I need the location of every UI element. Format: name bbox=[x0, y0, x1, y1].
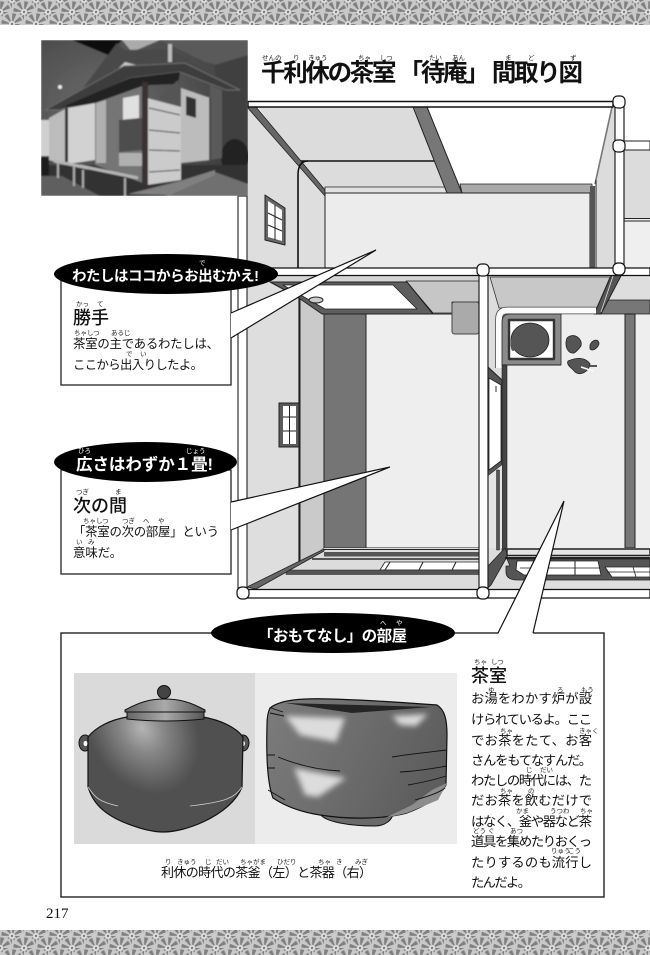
column bbox=[625, 314, 635, 548]
body text: tea room: の bbox=[528, 788, 534, 795]
walls bbox=[49, 109, 65, 165]
body text: tea room: 道具を集めたりおくっ bbox=[471, 834, 592, 849]
heading: つぎ bbox=[76, 487, 90, 496]
image: tea bowl bbox=[255, 673, 457, 844]
pill heading: で bbox=[199, 260, 206, 267]
image caption: みぎ bbox=[355, 857, 368, 866]
image caption: ちゃがま bbox=[240, 857, 266, 866]
top beam bbox=[248, 102, 613, 107]
body text: tea room: ぐ bbox=[488, 828, 494, 835]
title furigana: あん bbox=[452, 54, 466, 62]
heading katte: かっ bbox=[76, 300, 89, 308]
image caption: 利休の時代の茶釜（左）と茶器（右） bbox=[161, 865, 372, 880]
floor plan illustration bbox=[237, 96, 650, 599]
body text: tea room: もう bbox=[581, 686, 594, 694]
body text: 茶室の主であるわたしは、 bbox=[73, 337, 219, 351]
plank wall bbox=[147, 98, 181, 185]
body text: tea room: だい bbox=[540, 766, 553, 774]
body text: ここから出入りしたよ。 bbox=[73, 358, 203, 372]
heading katte: 勝手 bbox=[73, 308, 109, 328]
hearth bbox=[502, 314, 561, 365]
kettle lid bbox=[127, 712, 204, 721]
body text: 意味だ。 bbox=[73, 546, 122, 560]
title furigana: ず bbox=[570, 53, 577, 62]
body text bbox=[73, 329, 219, 372]
pill heading bbox=[54, 442, 237, 482]
body text: み bbox=[88, 538, 95, 546]
body text: ちゃしつ bbox=[83, 517, 109, 525]
title with furigana: 千利休の茶室 「待庵」 間取り図 bbox=[261, 59, 583, 87]
body text: あるじ bbox=[111, 329, 130, 337]
pointer to next room bbox=[231, 467, 390, 530]
pill heading bbox=[54, 254, 278, 294]
pill heading: わたしはココからお出むかえ! bbox=[72, 268, 259, 285]
body text: tea room: お湯をわかす炉が設 bbox=[471, 691, 592, 706]
body text: ちゃしつ bbox=[74, 329, 100, 337]
title furigana: せんの bbox=[262, 54, 282, 62]
heading katte: て bbox=[97, 301, 104, 308]
title furigana: ちゃ bbox=[358, 54, 371, 62]
body text: tea room: はなく、釜や器など茶 bbox=[471, 814, 592, 829]
ceiling oval bbox=[309, 297, 323, 303]
top pattern band bbox=[0, 0, 650, 25]
heading: tea room: 茶室 bbox=[471, 666, 507, 686]
title furigana: り bbox=[293, 54, 300, 62]
image: tea kettle bbox=[74, 673, 255, 844]
bottom beam bbox=[244, 590, 650, 598]
title furigana: きゅう bbox=[308, 54, 328, 62]
utensils bbox=[566, 336, 599, 374]
image caption: じ bbox=[205, 858, 212, 866]
body text: い bbox=[76, 538, 82, 546]
floor bbox=[247, 548, 479, 590]
pill heading: や bbox=[396, 619, 402, 627]
upper room bbox=[238, 96, 650, 268]
body text: tea room bbox=[471, 686, 598, 890]
kettle body bbox=[88, 717, 243, 832]
pill heading: じょう bbox=[186, 447, 206, 455]
body text: や bbox=[158, 517, 164, 525]
heading: 次の間 bbox=[73, 496, 127, 516]
image caption: ひだり bbox=[277, 858, 296, 866]
pointer to tea room bbox=[498, 501, 564, 634]
title furigana: ど bbox=[528, 54, 535, 62]
heading: tea room: ちゃ bbox=[474, 658, 487, 666]
body text: tea room: たんだよ。 bbox=[471, 875, 531, 890]
door bbox=[488, 367, 502, 550]
body text: tea room: だお茶を飲むだけで bbox=[471, 793, 592, 808]
body text: 「茶室の次の部屋」という bbox=[73, 525, 219, 539]
image caption: き bbox=[336, 858, 342, 866]
title furigana: しつ bbox=[380, 54, 393, 62]
title furigana: ま bbox=[505, 54, 512, 62]
body text: tea room: わたしの時代には、た bbox=[471, 773, 592, 788]
middle beam bbox=[238, 268, 650, 276]
wall box bbox=[452, 302, 479, 334]
title furigana: たい bbox=[429, 54, 442, 62]
body text: い bbox=[140, 350, 146, 358]
body text: tea room: でお茶をたて、お客 bbox=[471, 733, 592, 748]
panel: tea room bbox=[61, 501, 604, 897]
post right bbox=[615, 102, 624, 268]
photo of the tea house bbox=[41, 40, 249, 196]
lower eave bbox=[45, 63, 240, 110]
window side bbox=[279, 403, 299, 447]
body text: tea room: ちゃ bbox=[500, 787, 513, 795]
body text: tea room: うつわ bbox=[550, 807, 570, 815]
body text: tea room: ろ bbox=[557, 686, 564, 694]
body text: tea room: けられているよ。ここ bbox=[471, 712, 592, 727]
body text: tea room: かま bbox=[516, 807, 529, 815]
bottom pattern band bbox=[0, 930, 650, 955]
pill heading: ひろ bbox=[78, 447, 91, 455]
upper roof bbox=[84, 42, 168, 88]
icon: upper window bbox=[265, 195, 285, 245]
body text: tea room: ちゃ bbox=[580, 807, 593, 815]
heading: ま bbox=[115, 488, 122, 496]
body text: tea room: りゅう bbox=[551, 847, 570, 855]
body text: tea room: あつ bbox=[510, 827, 523, 835]
body text: tea room: ちゃ bbox=[500, 727, 513, 735]
pill heading bbox=[211, 613, 455, 653]
lower left room: next room bbox=[238, 268, 479, 590]
body text: tea room: さんをもてなすんだ。 bbox=[471, 753, 592, 768]
body text: つぎ bbox=[122, 516, 136, 525]
body text: で bbox=[126, 351, 133, 358]
body text: tea room: たりするのも流行し bbox=[471, 855, 592, 870]
pill heading: 広さはわずか１畳! bbox=[76, 455, 213, 474]
pointer to katte bbox=[231, 250, 376, 338]
floor bbox=[488, 548, 650, 590]
image caption bbox=[161, 857, 372, 880]
body text: tea room: ゆ bbox=[488, 686, 494, 694]
body text: tea room: きゃく bbox=[579, 727, 598, 735]
body text: tea room: じ bbox=[526, 766, 532, 774]
callout: tsuginoma bbox=[54, 442, 390, 574]
bench bbox=[54, 161, 138, 178]
page number: 217 bbox=[46, 906, 69, 922]
pill heading: 「おもてなし」の部屋 bbox=[258, 627, 407, 645]
pill heading: へ bbox=[380, 620, 387, 627]
title furigana bbox=[262, 53, 577, 62]
body text: へ bbox=[143, 518, 150, 525]
image caption: きゅう bbox=[177, 858, 196, 866]
body text: tea room: こう bbox=[568, 847, 581, 855]
kettle handles bbox=[79, 735, 249, 751]
heading bbox=[73, 487, 127, 516]
lower right room: tea room bbox=[479, 274, 650, 590]
callout: katte bbox=[54, 250, 376, 385]
body text: tea room: どう bbox=[473, 827, 486, 835]
image caption: り bbox=[165, 858, 172, 866]
image caption: だい bbox=[216, 858, 229, 866]
image caption: ちゃ bbox=[318, 858, 331, 866]
body text bbox=[73, 516, 219, 560]
heading: tea room: しつ bbox=[491, 658, 504, 666]
